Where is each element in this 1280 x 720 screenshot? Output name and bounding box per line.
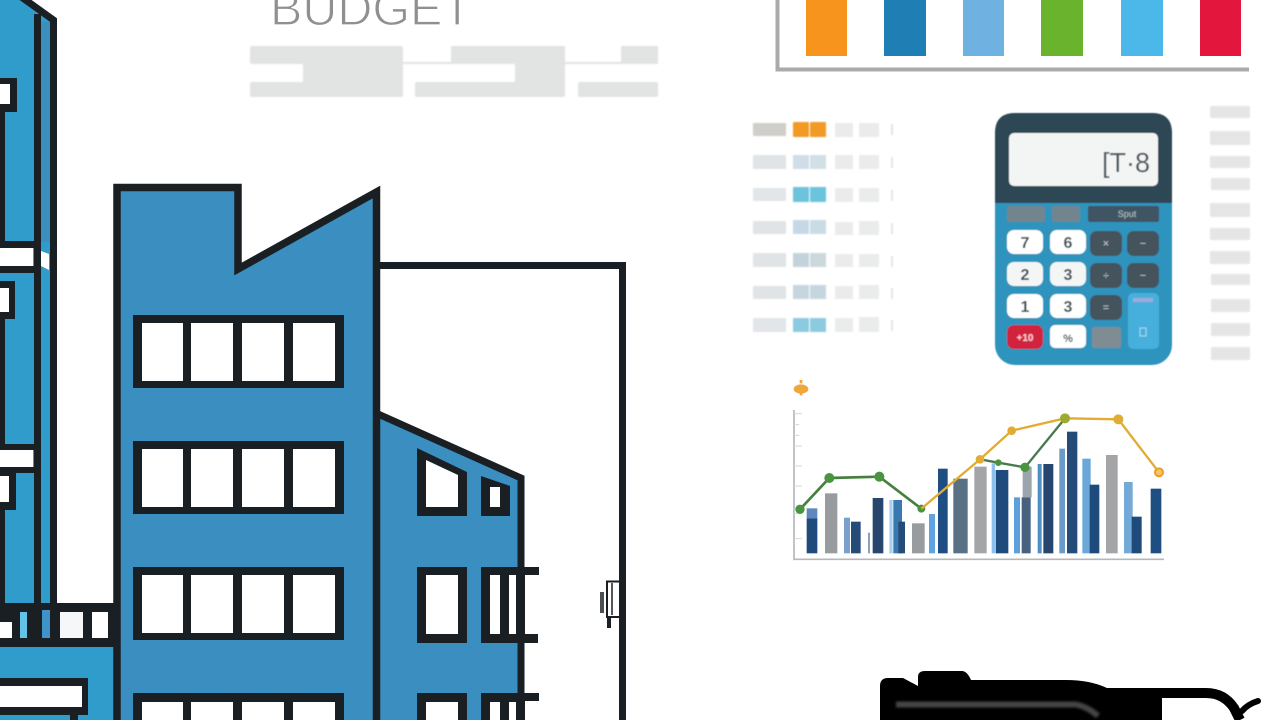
calculator dark keys: −: [1140, 238, 1146, 250]
calculator white keys: 6: [1064, 235, 1073, 252]
table row 6: [753, 285, 893, 299]
table row 7: [753, 317, 893, 332]
calculator screen: [1009, 133, 1158, 186]
calculator red key: +10: [1017, 333, 1034, 344]
calculator function keys: [1007, 206, 1159, 222]
table placeholder: [753, 122, 893, 332]
calculator function keys: Sput: [1118, 209, 1137, 219]
icon: black object at bottom: [880, 671, 1258, 720]
calculator white keys: 1: [1021, 299, 1030, 316]
building: right wing: [378, 414, 539, 720]
combo chart: [794, 380, 1164, 559]
calculator white keys: [1007, 230, 1086, 348]
building: main block: [117, 187, 377, 720]
bar chart: colour bars: [778, 0, 1249, 70]
calculator white keys: 7: [1021, 235, 1030, 252]
calculator top panel: [995, 113, 1172, 203]
calculator tall blue key: [1128, 293, 1159, 349]
calculator white keys: %: [1063, 333, 1073, 345]
table row 3: [753, 187, 893, 202]
table row 2: [753, 155, 893, 169]
yellow line series: [921, 413, 1163, 509]
building: outline frame behind: [378, 266, 622, 720]
calculator: [995, 113, 1172, 365]
calculator dark keys: −: [1140, 270, 1146, 282]
calculator dark keys: [1090, 231, 1159, 320]
table row 4: [753, 220, 893, 235]
calculator body: [995, 113, 1172, 365]
calculator white keys: 3: [1064, 267, 1073, 284]
side text placeholder: [1210, 106, 1250, 360]
table row 5: [753, 253, 893, 267]
calculator display digits: [T·8: [1102, 147, 1150, 178]
chart axes: [794, 410, 1164, 559]
chart icon: [794, 380, 808, 395]
calculator white keys: 3: [1064, 299, 1073, 316]
calculator dark keys: ×: [1103, 238, 1109, 250]
calculator white keys: 2: [1021, 267, 1030, 284]
calculator grey key: [1092, 327, 1121, 348]
building: left tower: [0, 0, 54, 606]
table row 1: [753, 122, 893, 137]
text block placeholder: [250, 46, 658, 97]
calculator dark keys: ÷: [1103, 270, 1109, 282]
chart bars: [807, 432, 1161, 553]
green line series: [795, 418, 1065, 514]
calculator red key: [1007, 325, 1043, 349]
calculator dark keys: =: [1103, 302, 1109, 314]
building: podium with windows: [0, 603, 116, 720]
icon: door handle: [600, 582, 619, 628]
